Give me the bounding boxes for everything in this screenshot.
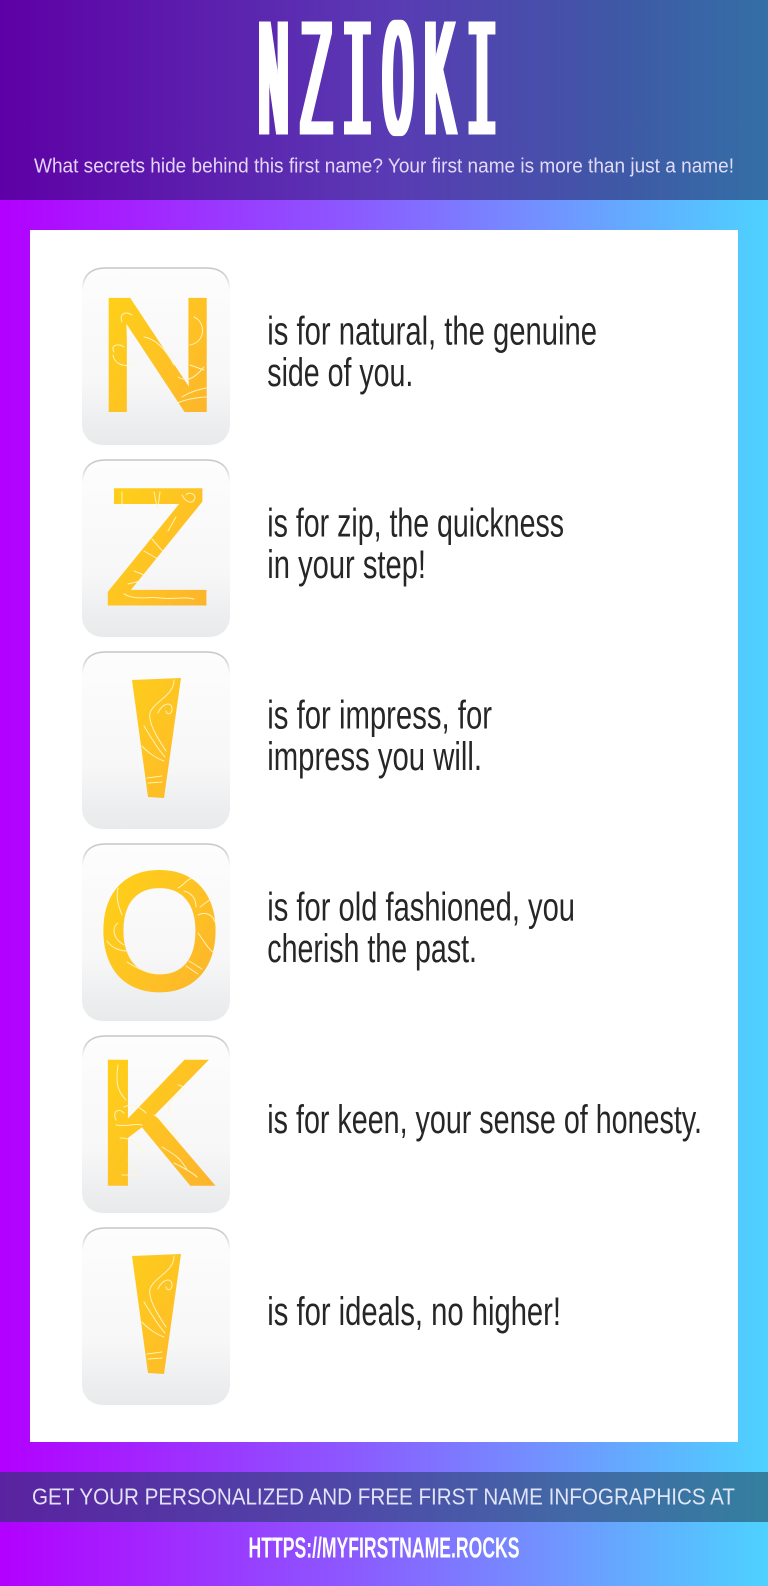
footer band [0, 1472, 768, 1522]
text: Z line: in your step! [267, 543, 426, 587]
text: O line: cherish the past. [267, 927, 477, 971]
tile: letter Z: Z [104, 455, 210, 640]
text: N line: side of you. [267, 351, 413, 395]
tile: letter O: O [99, 839, 220, 1024]
footer url: HTTPS://MYFIRSTNAME.ROCKS [248, 1532, 520, 1564]
text: I line [267, 694, 492, 779]
white content panel [30, 230, 738, 1442]
text: I line (second): is for ideals, no higher! [267, 1290, 561, 1334]
text: I line: impress you will. [267, 735, 482, 779]
text: I line: is for impress, for [267, 694, 492, 738]
text: N line [267, 310, 597, 395]
text: Z line: is for zip, the quickness [267, 502, 564, 546]
subtitle: What secrets hide behind this first name? Your first name is more than just a name! [34, 156, 734, 178]
text: O line: is for old fashioned, you [267, 886, 575, 930]
tile: letter I: I [98, 640, 214, 836]
tile: letter N: N [97, 265, 218, 444]
text: Z line [267, 502, 564, 587]
tile: letter K: K [95, 1023, 214, 1222]
text: O line [267, 886, 575, 971]
text: N line: is for natural, the genuine [267, 310, 597, 354]
tile: letter I (second): I [98, 1216, 214, 1412]
header banner [0, 0, 768, 200]
